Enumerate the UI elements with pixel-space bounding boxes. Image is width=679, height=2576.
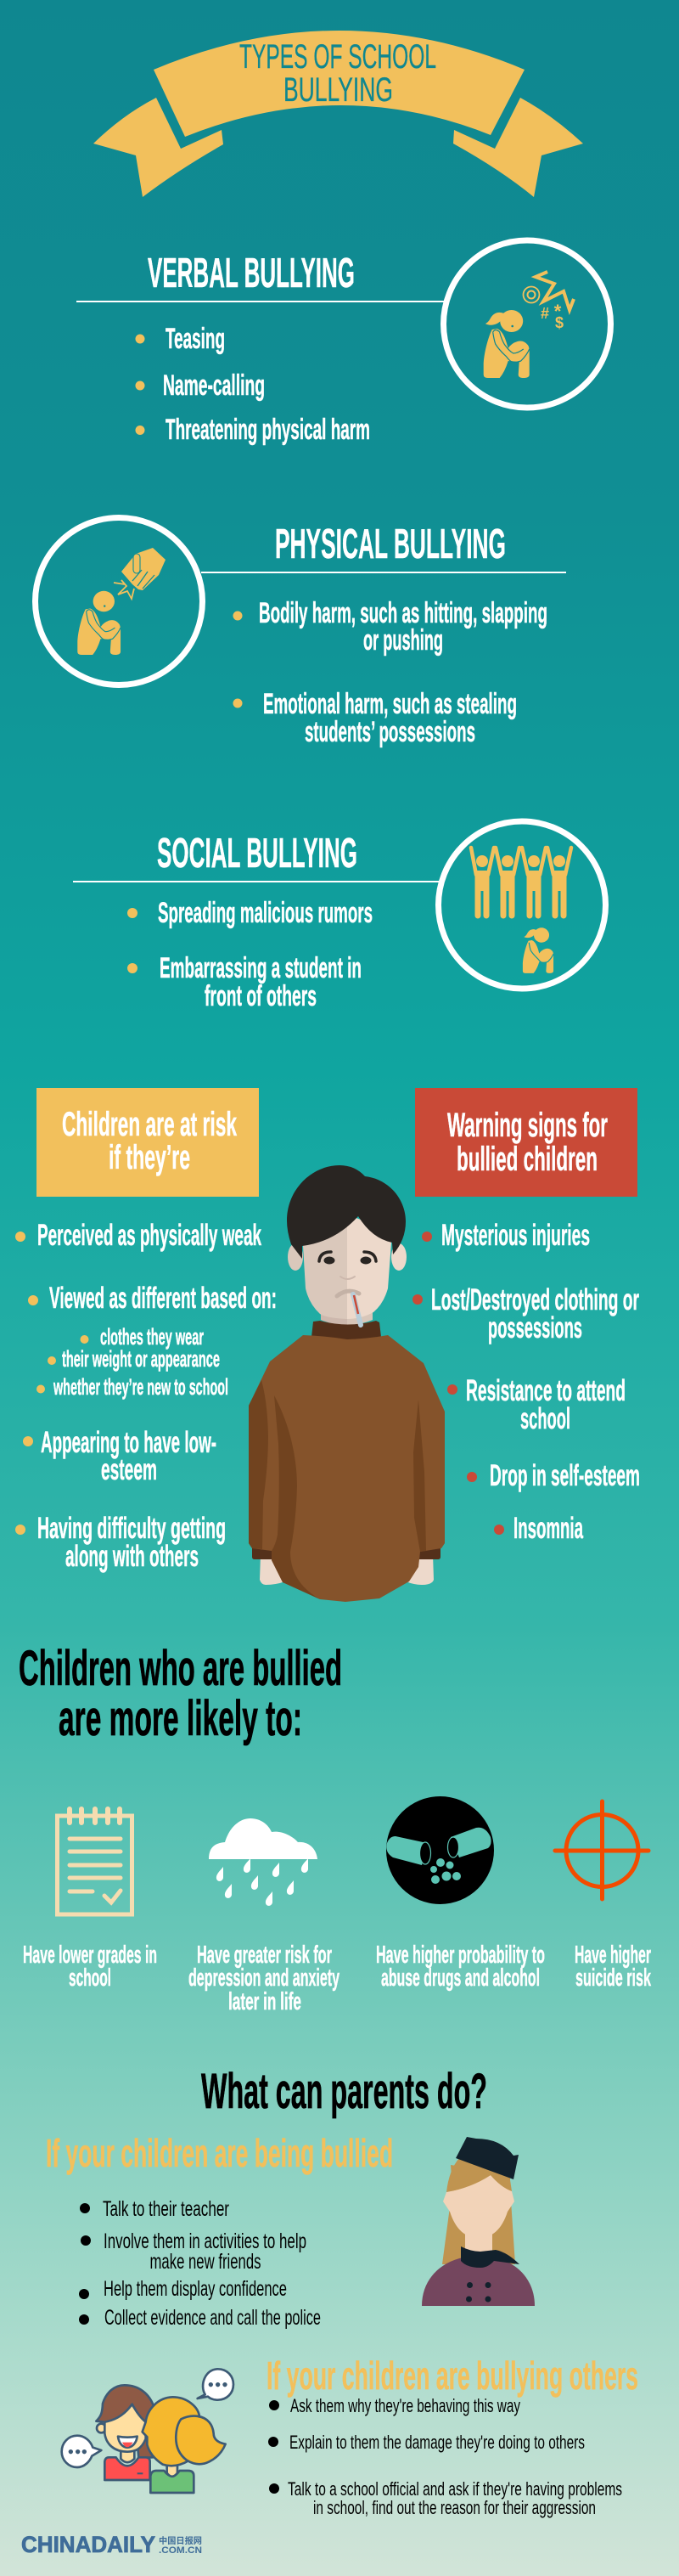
sweater (249, 1335, 445, 1602)
list: risk factors: along with others (65, 1540, 199, 1573)
list: being bullied advice: Help them display confidence (104, 2277, 287, 2301)
list: risk factors: Perceived as physically weak (37, 1219, 261, 1252)
list: warning signs: school (520, 1402, 570, 1435)
panel: children at risk (15, 1088, 277, 1573)
item: lower grades (23, 1809, 157, 1992)
speech bubble: left (62, 2436, 101, 2467)
subheading: being bullied: If your children are being bullied (46, 2131, 393, 2175)
ears (288, 1243, 303, 1271)
illustration: two children talking (62, 2369, 233, 2493)
list: being bullied advice (79, 2197, 321, 2330)
list: verbal bullying (136, 323, 370, 446)
girl with brown hair (96, 2385, 154, 2480)
icon: crosshair target (555, 1801, 648, 1899)
mouth (337, 1291, 359, 1296)
illustration: woman (422, 2137, 535, 2306)
heading: more likely to: are more likely to: (59, 1691, 302, 1746)
panel: warning signs (412, 1088, 640, 1545)
panel: if bullying others (62, 2353, 638, 2518)
list: physical bullying (233, 597, 547, 748)
cuffs (252, 1546, 441, 1559)
list: risk factors: Appearing to have low- (41, 1426, 216, 1459)
item: suicide risk (555, 1801, 651, 1992)
list: risk factors: clothes they wear (100, 1324, 204, 1350)
list: verbal bullying: Teasing (166, 323, 225, 355)
item: lower grades: Have lower grades in (23, 1942, 157, 1969)
heading box: warning signs (415, 1088, 637, 1197)
item: drugs and alcohol (376, 1796, 545, 1992)
heading: social bullying: SOCIAL BULLYING (157, 831, 357, 877)
item: depression and anxiety (188, 1818, 340, 2015)
icon: social bullying circle (438, 821, 606, 989)
icon: physical bullying circle (36, 518, 202, 685)
icon: verbal bullying circle: $ (555, 314, 564, 331)
list: risk factors (15, 1219, 277, 1573)
heading: more likely to: Children who are bullied (19, 1641, 342, 1696)
title text (239, 38, 436, 109)
item: depression and anxiety: depression and anxiety (188, 1964, 340, 1992)
list: physical bullying: students’ possessions (305, 716, 475, 748)
logo: China Daily: 中国日报网 (159, 2535, 202, 2546)
panel: if being bullied (46, 2131, 535, 2330)
section: social bullying (73, 821, 606, 1012)
icon: verbal bullying circle: # (541, 305, 549, 322)
icon: rain cloud (209, 1818, 317, 1906)
logo: China Daily: .COM.CN (159, 2545, 202, 2556)
item: lower grades: school (69, 1964, 111, 1992)
list: physical bullying: or pushing (363, 624, 443, 657)
list: risk factors: their weight or appearance (62, 1346, 220, 1372)
icon: notepad (58, 1809, 132, 1914)
list: social bullying (127, 897, 373, 1012)
hair (287, 1165, 406, 1259)
list: social bullying: Embarrassing a student in (160, 952, 362, 984)
list: warning signs (412, 1219, 640, 1545)
list: risk factors: Viewed as different based on: (49, 1282, 277, 1315)
eyes and brows (319, 1252, 376, 1264)
section: verbal bullying (76, 240, 611, 446)
list: warning signs: possessions (488, 1311, 582, 1344)
hands (260, 1554, 434, 1585)
item: depression and anxiety: Have greater risk for (197, 1942, 332, 1969)
collar (311, 1321, 381, 1342)
heading: more likely to (19, 1641, 342, 1746)
list: verbal bullying: Threatening physical harm (166, 414, 370, 446)
item: drugs and alcohol: abuse drugs and alcohol (381, 1964, 540, 1992)
logo: China Daily: CHINADAILY (21, 2532, 155, 2557)
list: bullying others advice: Ask them why they're behaving this way (290, 2395, 521, 2416)
list: bullying others advice (268, 2395, 622, 2518)
heading box: at risk: Children are at risk (62, 1106, 237, 1143)
sweater shading (249, 1380, 426, 1599)
illustration: sick child (249, 1165, 445, 1602)
title text: TYPES OF SCHOOL (239, 38, 436, 76)
list: being bullied advice: make new friends (149, 2250, 261, 2274)
icon: pills (386, 1796, 494, 1904)
item: depression and anxiety: later in life (228, 1988, 301, 2015)
heading box: at risk: if they’re (109, 1139, 190, 1176)
list: social bullying: front of others (205, 980, 317, 1012)
title banner (93, 31, 583, 197)
list: risk factors: esteem (101, 1453, 157, 1486)
list: being bullied advice: Involve them in activities to help (104, 2229, 306, 2253)
heading: verbal bullying: VERBAL BULLYING (148, 251, 355, 296)
list: being bullied advice: Collect evidence and call the police (104, 2306, 321, 2330)
nose (340, 1277, 355, 1279)
item: drugs and alcohol: Have higher probability to (376, 1942, 545, 1969)
list: risk factors: Having difficulty getting (37, 1512, 226, 1545)
list: warning signs: Insomnia (513, 1512, 583, 1545)
heading box: at risk (36, 1088, 259, 1197)
face (302, 1215, 347, 1319)
icon: verbal bullying circle: * (554, 301, 562, 322)
girl with blonde hair (143, 2397, 226, 2493)
speech bubble: right (198, 2369, 233, 2400)
list: being bullied advice: Talk to their teacher (103, 2197, 229, 2221)
icon: verbal bullying circle (443, 240, 611, 408)
neck (321, 1308, 347, 1325)
title text: BULLYING (283, 71, 393, 109)
list: verbal bullying: Name-calling (163, 369, 265, 402)
section: physical bullying (36, 518, 566, 748)
thermometer (353, 1294, 361, 1325)
list: social bullying: Spreading malicious rumors (158, 897, 373, 929)
list: risk factors: whether they’re new to school (53, 1374, 228, 1400)
